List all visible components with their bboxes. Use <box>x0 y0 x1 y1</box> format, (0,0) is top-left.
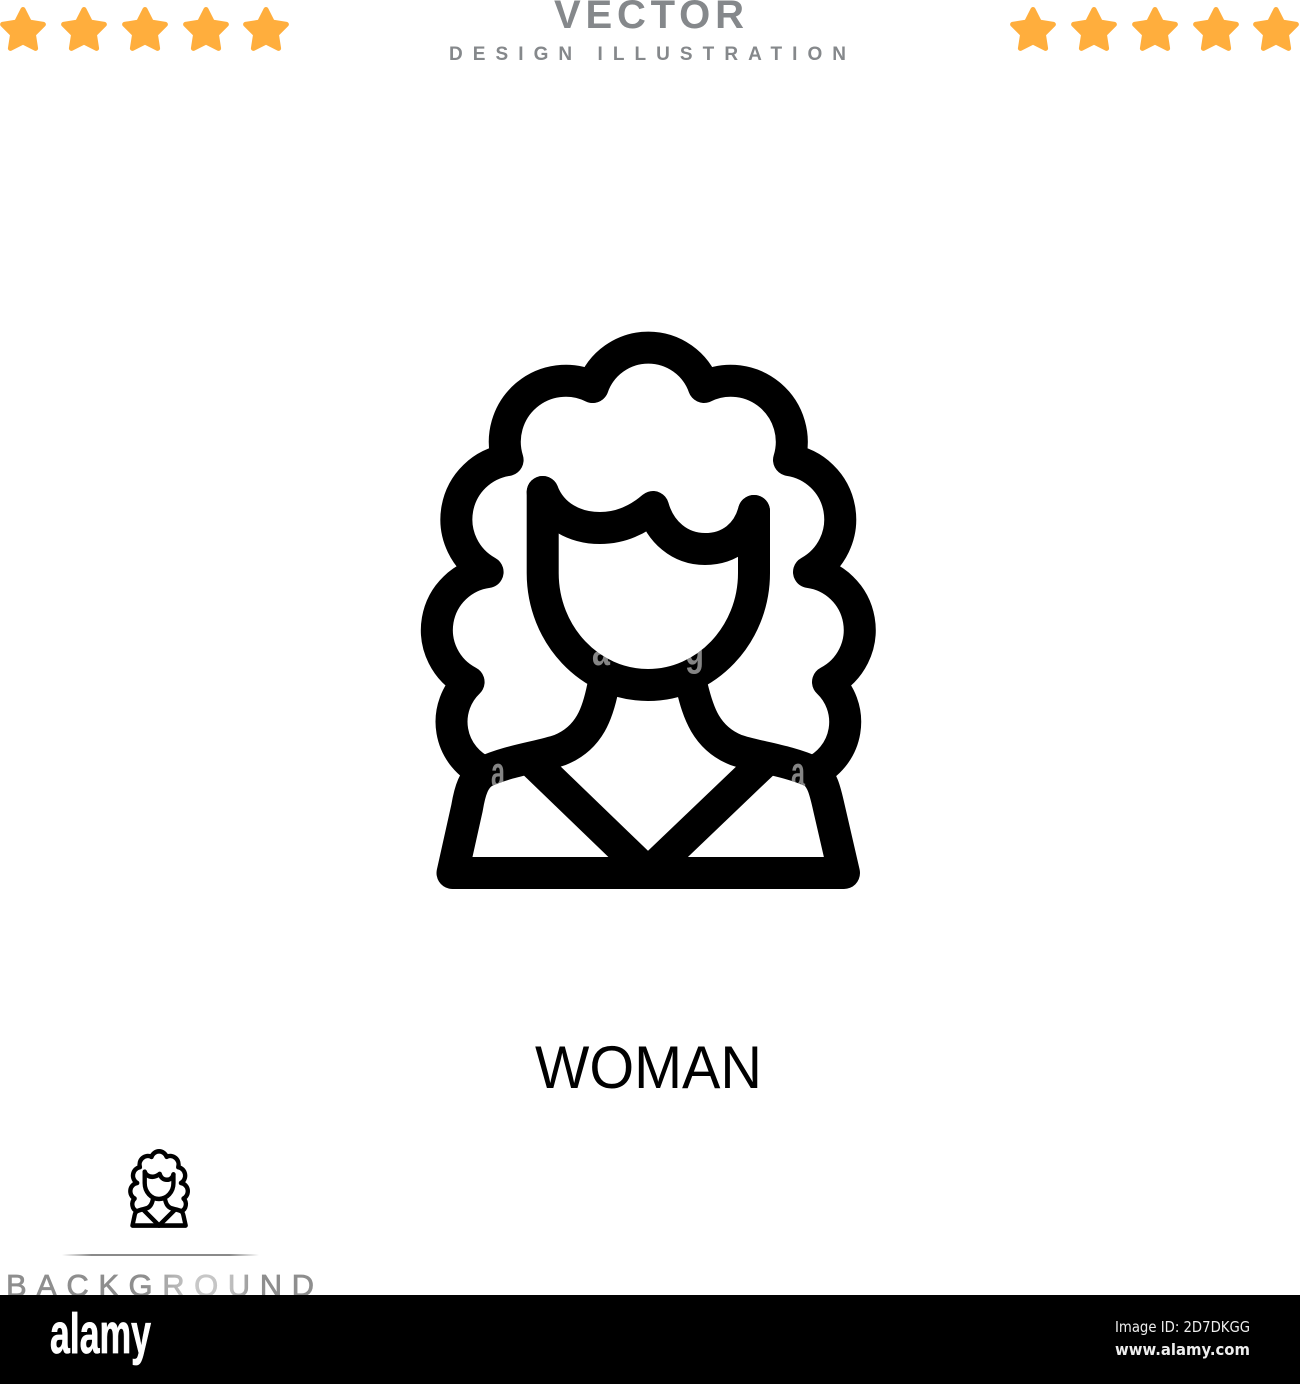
watermark letters over icon: a <box>491 748 505 797</box>
label: WOMAN: WOMAN <box>535 1034 762 1101</box>
text: BACKGROUND: BACKGROUND <box>6 1268 314 1303</box>
stars: top left rating <box>3 10 286 48</box>
watermark letters over icon: a <box>791 748 805 797</box>
watermark letters over icon: g <box>685 626 704 675</box>
logo: alamy: alamy <box>50 1302 151 1366</box>
subheading: DESIGN ILLUSTRATION: DESIGN ILLUSTRATION <box>449 44 846 65</box>
text: image id: Image ID: 2D7DKGG <box>1115 1318 1250 1336</box>
text: website: www.alamy.com <box>1115 1340 1250 1359</box>
stars: top right rating <box>1013 10 1296 48</box>
divider line <box>62 1254 259 1256</box>
footer bar <box>0 1295 1300 1384</box>
watermark letters over icon <box>491 626 805 797</box>
icon: woman small preview <box>130 1151 188 1226</box>
watermark letters over icon: a <box>592 626 610 675</box>
icon: woman with curly hair, large <box>437 348 860 873</box>
